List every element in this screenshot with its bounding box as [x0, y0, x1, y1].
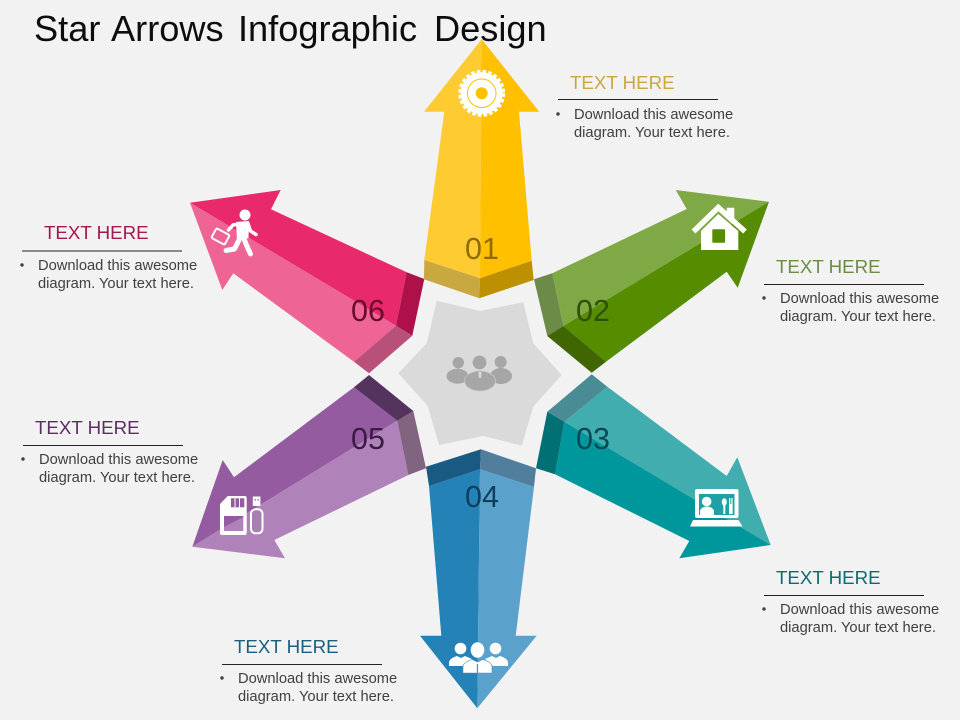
arrow 01: yellow — [424, 39, 539, 298]
arrow 02: green — [534, 190, 769, 373]
text block 04: Download this awesome — [238, 671, 397, 687]
text block 03: diagram. Your text here. — [780, 620, 936, 636]
number 04: 04 — [465, 480, 499, 514]
title: Design — [434, 8, 547, 49]
title: Infographic — [238, 8, 417, 49]
title: Arrows — [111, 8, 224, 49]
arrow 03: teal — [536, 374, 771, 558]
text block 05: Download this awesome — [39, 452, 198, 468]
arrow 04: blue — [420, 449, 537, 708]
text block 06: diagram. Your text here. — [38, 276, 194, 292]
text block 05: TEXT HERE — [35, 417, 140, 438]
arrow 06: pink — [190, 190, 424, 373]
number 03: 03 — [576, 422, 610, 456]
text block 03: TEXT HERE — [776, 567, 881, 588]
text block 06: TEXT HERE — [44, 222, 149, 243]
text block 03 — [762, 567, 939, 636]
icon: running businessman — [211, 210, 256, 254]
arrow 05: purple — [192, 375, 426, 558]
number 02: 02 — [576, 294, 610, 328]
text block 01: diagram. Your text here. — [574, 125, 730, 141]
central star — [398, 301, 562, 446]
text block 06 — [20, 222, 197, 292]
text block 04: TEXT HERE — [234, 636, 339, 657]
text block 05 — [21, 417, 198, 486]
number 06: 06 — [351, 294, 385, 328]
text block 05: diagram. Your text here. — [39, 470, 195, 486]
icon: floppy disk and usb — [220, 496, 262, 535]
text block 06: Download this awesome — [38, 258, 197, 274]
text block 02: Download this awesome — [780, 291, 939, 307]
text block 01: TEXT HERE — [570, 72, 675, 93]
text block 02: diagram. Your text here. — [780, 309, 936, 325]
icon: house — [694, 208, 745, 250]
text block 04: diagram. Your text here. — [238, 689, 394, 705]
text block 02: TEXT HERE — [776, 256, 881, 277]
icon: business team — [449, 642, 508, 673]
text block 03: Download this awesome — [780, 602, 939, 618]
icon: gear — [460, 71, 504, 115]
text block 02 — [762, 256, 939, 325]
number 01: 01 — [465, 232, 499, 266]
title: Star — [34, 8, 100, 49]
number 05: 05 — [351, 422, 385, 456]
icon: laptop — [690, 489, 742, 526]
text block 04 — [220, 636, 397, 705]
text block 01 — [556, 72, 733, 141]
text block 01: Download this awesome — [574, 107, 733, 123]
icon: centre team — [446, 356, 512, 391]
